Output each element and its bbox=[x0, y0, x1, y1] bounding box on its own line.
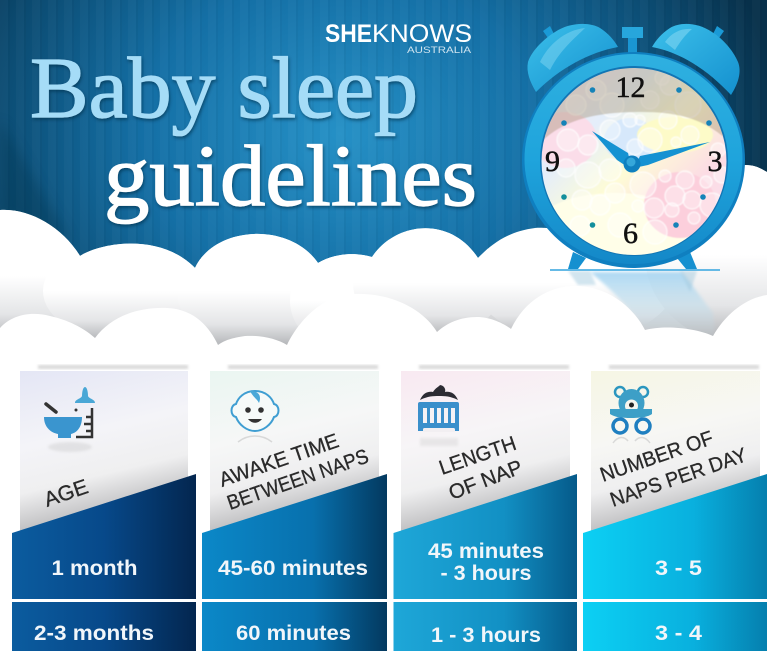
label: age: AGE bbox=[41, 475, 91, 512]
value band bbox=[394, 474, 577, 599]
label: length of nap: OF NAP bbox=[446, 456, 526, 505]
value: 45 minutes - 3 hours: - 3 hours bbox=[440, 561, 532, 585]
clock numerals bbox=[545, 71, 722, 250]
value: 1 - 3 hours: 1 - 3 hours bbox=[431, 623, 541, 647]
clock hands bbox=[592, 131, 710, 172]
logo: SheKnows Australia: SHE bbox=[325, 20, 372, 48]
value band bbox=[12, 474, 196, 599]
clock numerals: 9 bbox=[545, 145, 560, 178]
label: number of naps per day: NUMBER OF bbox=[597, 427, 716, 487]
clock feet bbox=[568, 252, 697, 269]
value: 60 minutes: 60 minutes bbox=[236, 621, 351, 645]
label: awake time between naps: AWAKE TIME bbox=[216, 429, 342, 492]
icon: bowl and bottle bbox=[44, 387, 95, 452]
value: 2-3 months: 2-3 months bbox=[34, 621, 154, 645]
value: 1 month: 1 month bbox=[52, 556, 138, 580]
logo: SheKnows Australia bbox=[325, 20, 472, 56]
clouds bbox=[0, 165, 767, 345]
clock numerals: 12 bbox=[616, 71, 646, 104]
value: 3 - 5: 3 - 5 bbox=[655, 556, 702, 580]
logo: SheKnows Australia: KNOWS bbox=[372, 20, 472, 48]
icon: alarm clock bbox=[522, 24, 745, 269]
label: length of nap bbox=[436, 432, 526, 505]
value band bbox=[583, 474, 767, 599]
value: 3 - 4: 3 - 4 bbox=[655, 621, 702, 645]
clock body bbox=[522, 52, 745, 268]
value: 45 minutes - 3 hours bbox=[428, 539, 544, 585]
icon: crib bbox=[418, 385, 459, 446]
clock face bbox=[542, 68, 726, 255]
panel: awake time column bbox=[202, 365, 387, 651]
title: Baby sleep bbox=[30, 39, 418, 136]
value: 45-60 minutes: 45-60 minutes bbox=[218, 556, 368, 580]
clock numerals: 6 bbox=[623, 217, 638, 250]
label: length of nap: LENGTH bbox=[436, 432, 519, 480]
value band bbox=[202, 474, 387, 599]
panel: age column bbox=[12, 365, 196, 651]
title bbox=[30, 39, 477, 224]
clock numerals: 3 bbox=[708, 145, 722, 178]
header background bbox=[0, 0, 767, 290]
clock minute dots bbox=[561, 87, 712, 228]
logo: SheKnows Australia: AUSTRALIA bbox=[407, 45, 472, 56]
icon: teddy bear bbox=[610, 387, 652, 443]
clock reflection bbox=[550, 269, 720, 337]
value: 45 minutes - 3 hours: 45 minutes bbox=[428, 539, 544, 563]
label: awake time between naps: BETWEEN NAPS bbox=[224, 445, 372, 515]
panel: number of naps column bbox=[583, 365, 767, 651]
title: guidelines bbox=[104, 127, 477, 224]
icon: baby face bbox=[232, 391, 278, 442]
clock bells and hammer bbox=[527, 24, 740, 95]
panel: length of nap column bbox=[394, 365, 577, 651]
label: number of naps per day: NAPS PER DAY bbox=[607, 443, 750, 512]
